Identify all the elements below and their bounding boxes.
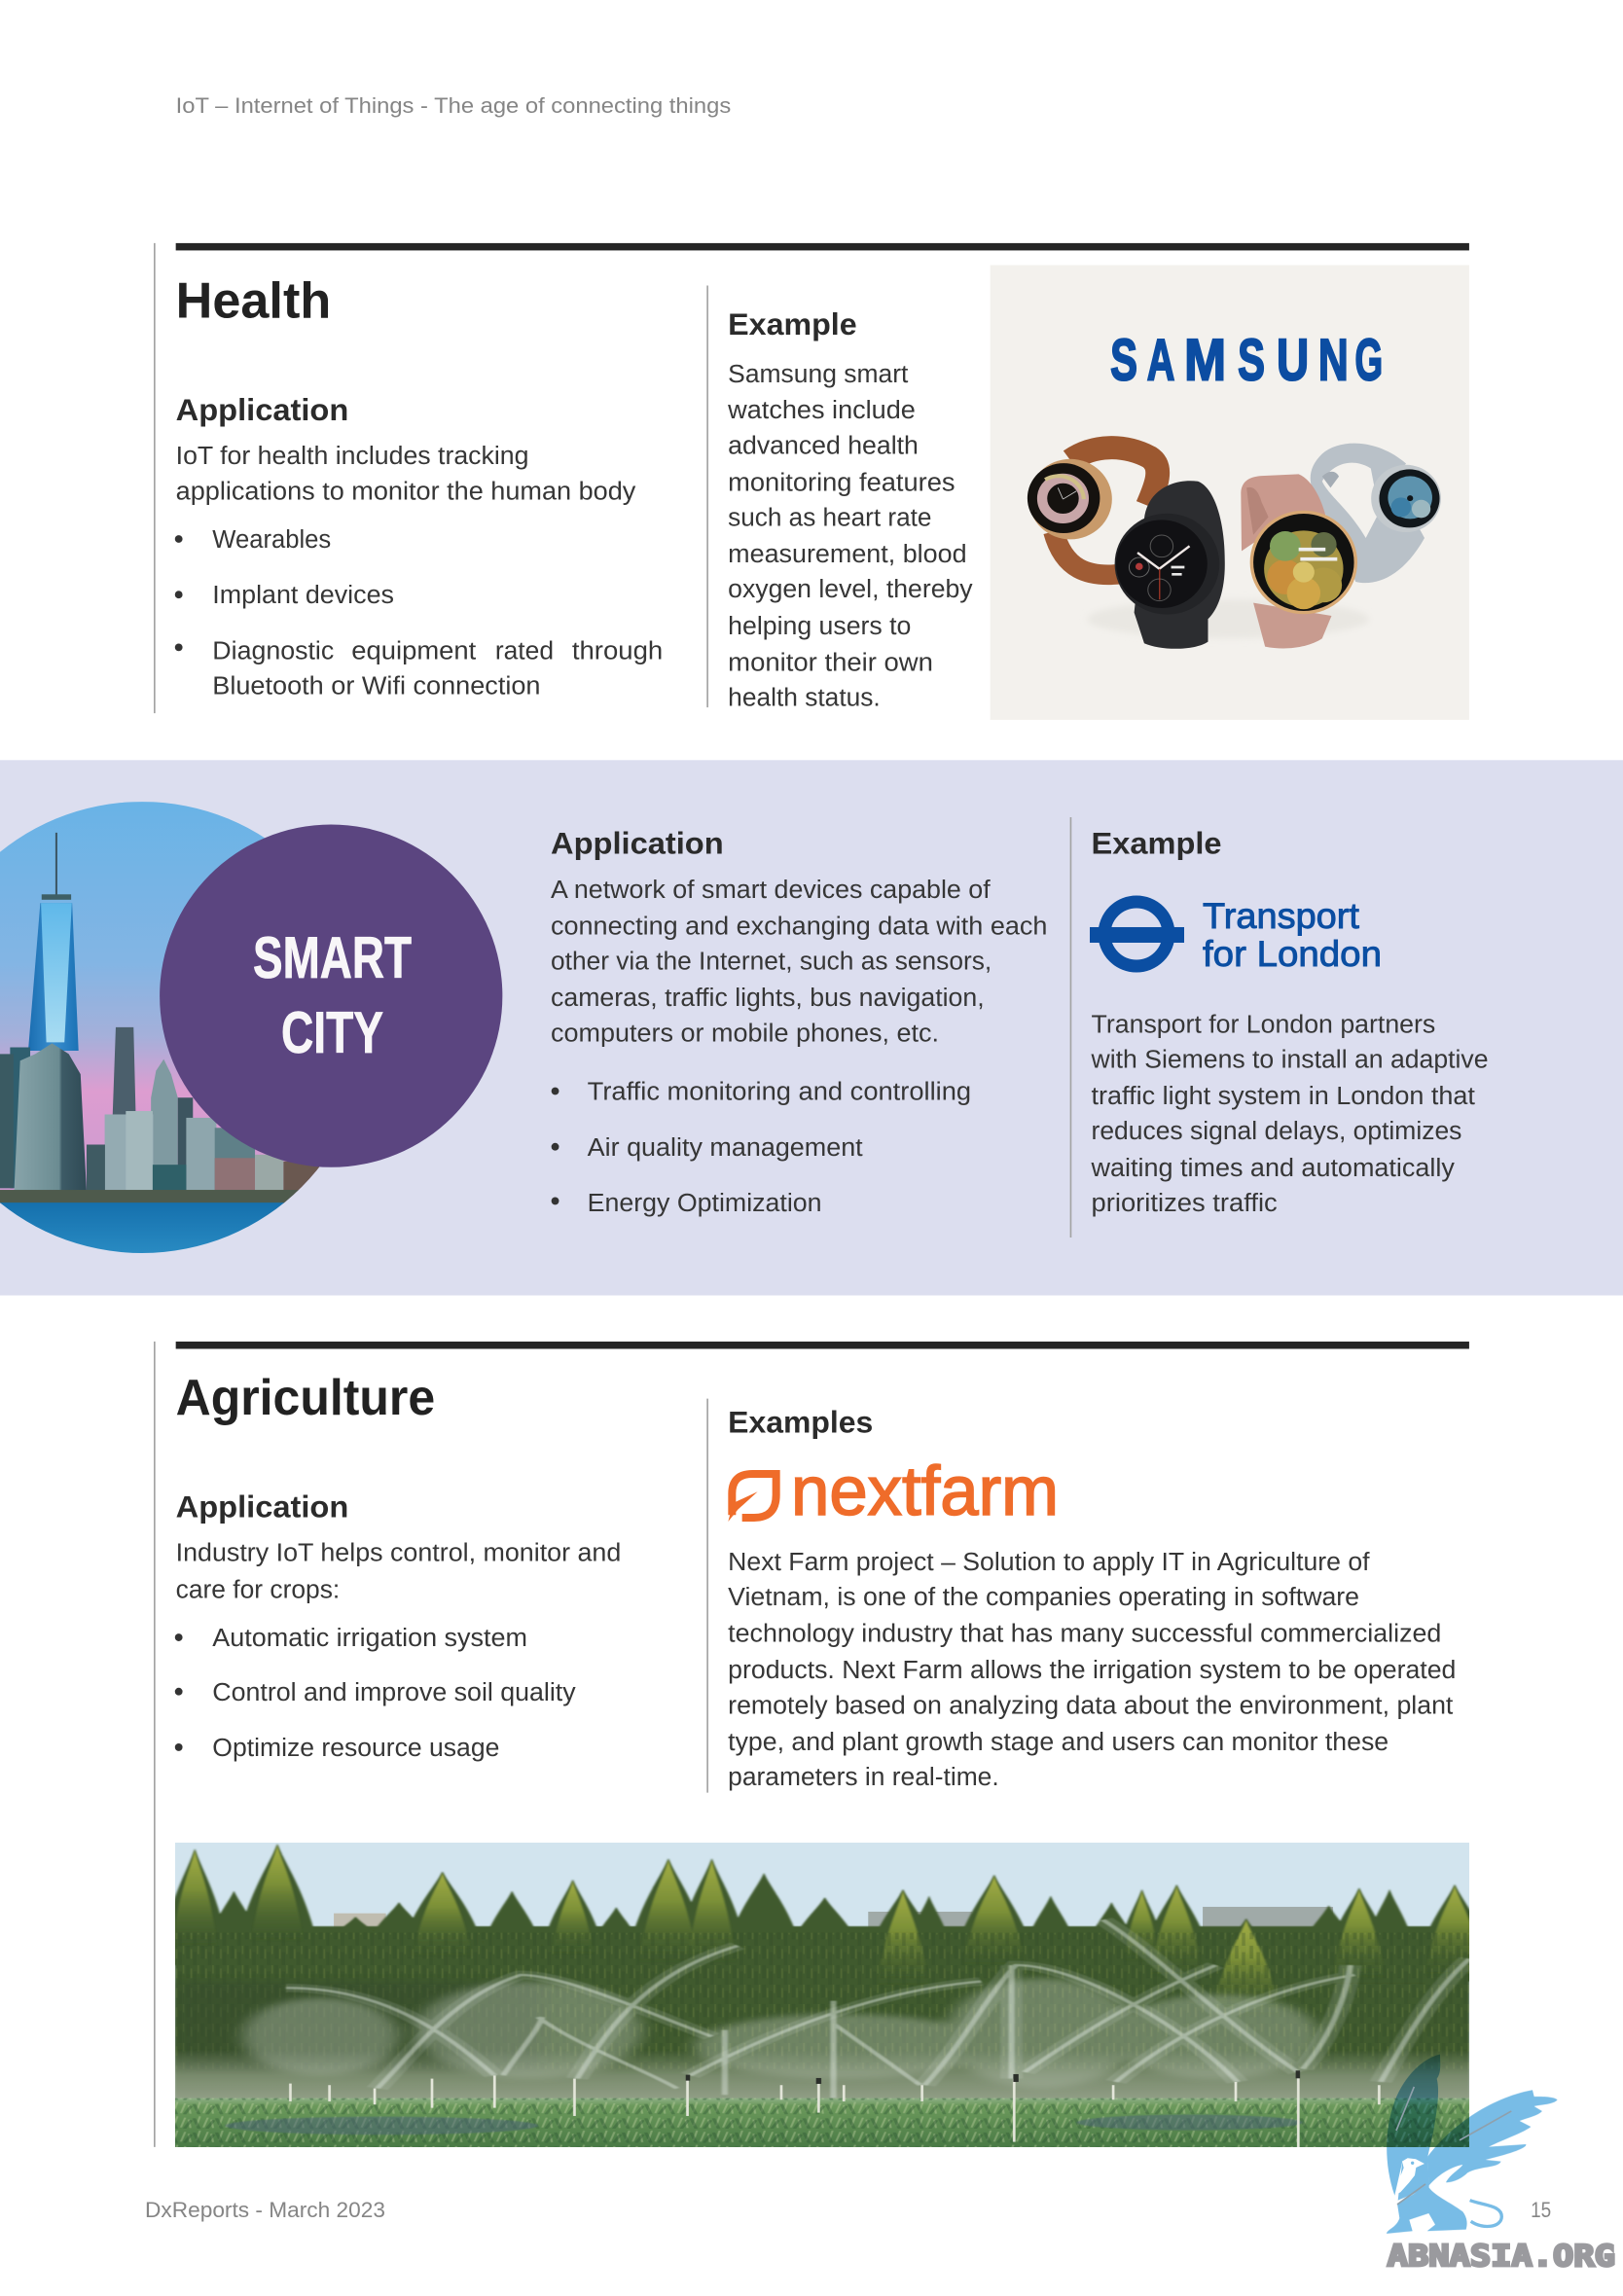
health column rule xyxy=(706,286,708,707)
health application block: Implant devices xyxy=(212,582,394,609)
transport for london logo: Transport xyxy=(1203,896,1359,936)
agriculture left rule xyxy=(154,1342,156,2147)
griffin quill lines xyxy=(1396,2087,1511,2205)
heading: health: Health xyxy=(176,273,331,330)
health example text: such as heart rate xyxy=(728,504,931,531)
silver watch xyxy=(1311,444,1441,583)
health example text: health status. xyxy=(728,685,881,712)
samsung logo: A xyxy=(1147,327,1174,393)
health example text: monitoring features xyxy=(728,469,956,496)
agriculture application block: Control and improve soil quality xyxy=(212,1679,576,1706)
agriculture application block: Application xyxy=(176,1489,348,1525)
shadow xyxy=(1087,599,1369,638)
smart city application text: computers or mobile phones, etc. xyxy=(551,1020,939,1047)
panel: health xyxy=(155,243,1469,720)
health application block: Diagnostic xyxy=(212,637,334,664)
samsung logo: M xyxy=(1184,327,1226,393)
health example text: Example xyxy=(728,306,857,341)
agriculture application block xyxy=(175,1489,621,1762)
samsung logo: G xyxy=(1354,327,1383,393)
nextfarm description: Next Farm project – Solution to apply IT in Agriculture of xyxy=(728,1549,1370,1576)
purple smart city circle xyxy=(160,825,502,1167)
samsung logo: S xyxy=(1238,327,1265,393)
agriculture application block: Optimize resource usage xyxy=(212,1735,499,1762)
nextfarm description: type, and plant growth stage and users can monitor these xyxy=(728,1729,1389,1756)
health example text: Samsung smart xyxy=(728,361,908,388)
smart city application text: Application xyxy=(551,826,724,861)
footer: page number: 15 xyxy=(1531,2198,1551,2222)
black watch xyxy=(1115,481,1225,649)
sunlit tree tops xyxy=(176,1845,1469,1994)
nextfarm description xyxy=(728,1549,1456,1791)
health left rule xyxy=(154,243,156,713)
health application block: Wearables xyxy=(212,526,331,554)
nextfarm logo: nextfarm xyxy=(791,1453,1059,1530)
irrigation photo xyxy=(159,1843,1498,2147)
agriculture examples heading: Examples xyxy=(728,1404,873,1439)
health example text: helping users to xyxy=(728,613,911,640)
city skyline photo circle xyxy=(0,802,319,1253)
health application block xyxy=(175,392,663,700)
agriculture application block: Automatic irrigation system xyxy=(212,1625,527,1652)
smart city example text: traffic light system in London that xyxy=(1092,1083,1475,1110)
transport for london logo xyxy=(1090,896,1382,974)
smart city application text: other via the Internet, such as sensors, xyxy=(551,949,992,976)
smart city application text: A network of smart devices capable of xyxy=(551,877,992,904)
icon: leaf xyxy=(728,1474,776,1522)
smart city application text: Air quality management xyxy=(588,1134,863,1162)
smart city application text: Traffic monitoring and controlling xyxy=(588,1079,971,1106)
smart city example text: waiting times and automatically xyxy=(1090,1155,1455,1182)
health example text: advanced health xyxy=(728,433,919,460)
griffin wings and body xyxy=(1387,2055,1558,2234)
nextfarm description: technology industry that has many successful commercialized xyxy=(728,1621,1441,1648)
smart city application text: cameras, traffic lights, bus navigation, xyxy=(551,985,985,1012)
smart city example text: reduces signal delays, optimizes xyxy=(1092,1118,1461,1145)
agriculture top bar xyxy=(176,1342,1469,1348)
smart city example heading: Example xyxy=(1092,826,1222,861)
panel: agriculture xyxy=(155,1342,1498,2147)
health example text: monitor their own xyxy=(728,649,933,676)
abnasia wordmark: ABNASIA.ORG xyxy=(1388,2240,1615,2274)
agriculture application block: Industry IoT helps control, monitor and xyxy=(176,1540,621,1567)
sprinkler stems xyxy=(290,2075,1379,2147)
smart city example text xyxy=(1090,1011,1488,1217)
health top bar xyxy=(176,243,1469,250)
samsung watches picture xyxy=(991,265,1469,720)
nextfarm description: products. Next Farm allows the irrigation system to be operated xyxy=(728,1657,1456,1684)
nextfarm description: Vietnam, is one of the companies operating in software xyxy=(728,1584,1359,1611)
smartwatches xyxy=(1028,444,1441,649)
footer: report name: DxReports - March 2023 xyxy=(145,2198,385,2222)
water jets xyxy=(286,1919,1469,2089)
samsung logo: S xyxy=(1110,327,1137,393)
health application block: through xyxy=(572,637,663,664)
health example text: measurement, blood xyxy=(728,541,967,568)
smart city application text xyxy=(551,826,1047,1217)
smart city label xyxy=(253,925,412,1065)
health application block: rated xyxy=(495,637,554,664)
samsung logo xyxy=(1110,327,1383,393)
spray haze xyxy=(242,1978,1320,2089)
health application block: Bluetooth or Wifi connection xyxy=(212,673,541,700)
dark tree mass xyxy=(159,1844,1498,2101)
samsung logo: N xyxy=(1318,327,1349,393)
nextfarm description: parameters in real-time. xyxy=(728,1764,999,1791)
smart city example text: Transport for London partners xyxy=(1092,1011,1435,1038)
smart city example text: with Siemens to install an adaptive xyxy=(1090,1046,1488,1073)
smart city example text: prioritizes traffic xyxy=(1092,1190,1278,1217)
nextfarm description: remotely based on analyzing data about the environment, plant xyxy=(728,1692,1453,1719)
smart city column rule xyxy=(1069,817,1071,1238)
health application block: equipment xyxy=(351,637,476,664)
smart city label: SMART xyxy=(253,925,412,990)
health example text: oxygen level, thereby xyxy=(728,576,973,603)
agriculture column rule xyxy=(706,1399,708,1793)
smart city application text: Energy Optimization xyxy=(588,1190,822,1217)
health example text: watches include xyxy=(727,397,916,424)
brown watch xyxy=(1028,448,1158,575)
health application block: Application xyxy=(176,392,348,427)
samsung logo: U xyxy=(1277,327,1309,393)
smart city application text: connecting and exchanging data with each xyxy=(551,913,1047,940)
heading: agriculture: Agriculture xyxy=(176,1370,435,1426)
agriculture application block: care for crops: xyxy=(176,1576,340,1603)
griffin neck highlight xyxy=(1395,2158,1425,2195)
smart city label: CITY xyxy=(281,1000,383,1065)
health application block: IoT for health includes tracking xyxy=(176,443,528,470)
page header: IoT – Internet of Things - The age of connecting things xyxy=(176,93,731,118)
abnasia griffin watermark xyxy=(1387,2055,1615,2274)
panel: smart city xyxy=(0,760,1623,1296)
griffin tail xyxy=(1470,2201,1501,2226)
health example text xyxy=(727,306,973,712)
pink watch xyxy=(1241,474,1357,648)
transport for london logo: for London xyxy=(1203,934,1382,974)
health application block: applications to monitor the human body xyxy=(176,478,636,505)
